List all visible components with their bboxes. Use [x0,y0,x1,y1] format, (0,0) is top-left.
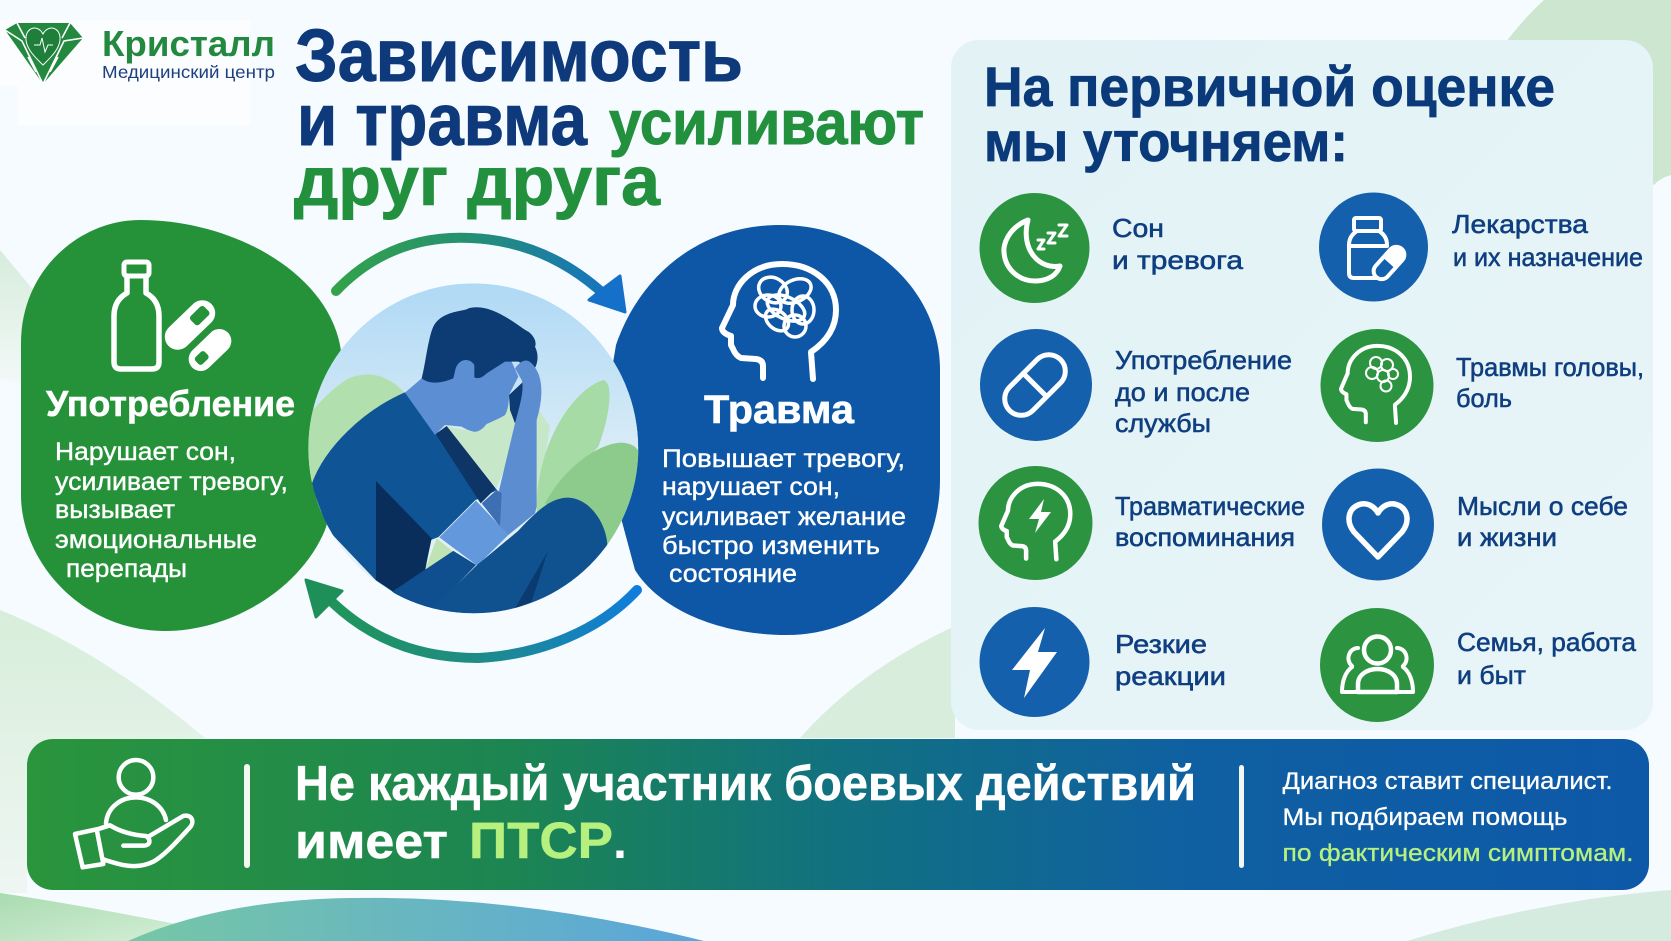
title: и травма [297,80,588,161]
banner [27,739,1649,890]
icon: moon [1004,220,1067,281]
text: Резкие [1115,629,1207,659]
panel: substance use [21,220,345,631]
side note: по фактическим симптомам. [1282,840,1634,867]
title: друг друга [294,142,661,220]
text [1457,627,1637,690]
text: use effects: Нарушает сон, [55,438,236,466]
panel heading: мы уточняем: [984,110,1348,173]
text: Сон [1112,213,1164,243]
item: family, work and daily life [1320,608,1637,722]
text: Употребление [1115,345,1292,375]
icon: lightning [1012,628,1057,698]
heading: Травма: Травма [704,388,855,432]
icon: heart [1349,504,1407,557]
text: Лекарства [1452,209,1589,239]
text: use effects: перепады [66,555,187,583]
icon: head with tangled brain [722,264,836,379]
icon: people [1342,636,1413,692]
text: реакции [1115,661,1226,691]
main statement: Не каждый участник боевых действий [295,757,1196,811]
text: use effects: усиливает тревогу, [55,468,288,496]
heading: Употребление: Употребление [46,383,295,424]
title [294,14,924,220]
text: trauma effects [662,445,906,588]
panel: trauma [600,225,940,635]
icon: head with lightning [1001,484,1070,559]
item: thoughts about self and life [1322,468,1628,580]
text [1452,209,1643,272]
text: Семья, работа [1457,627,1637,657]
logo subtitle: Медицинский центр [102,62,275,82]
item: traumatic memories [978,466,1305,580]
text: Травматические [1115,491,1305,521]
main statement: ПТСР [469,812,613,869]
text: trauma effects: быстро изменить [662,532,880,560]
title: Зависимость [295,14,743,97]
icon: bottle [114,262,159,369]
text: службы [1115,408,1211,438]
text [1115,345,1292,438]
text: и их назначение [1453,242,1643,272]
icon: head with brain [1341,346,1410,423]
text: и быт [1457,660,1526,690]
item: medication [1319,192,1643,302]
text: до и после [1115,377,1250,407]
icon: hand holding person [75,760,192,867]
text: воспоминания [1115,522,1295,552]
logo name: Кристалл [102,23,275,64]
side note: Мы подбираем помощь [1282,804,1568,831]
text: use effects: вызывает [55,496,176,524]
icon: pills [159,295,236,376]
illustration: person holding head [305,283,642,613]
panel heading: На первичной оценке [984,55,1555,118]
logo [0,20,275,125]
panel: primary assessment [951,40,1653,730]
item: sleep and anxiety [980,193,1244,303]
divider [244,764,250,868]
text: Мысли о себе [1457,491,1628,521]
text [1115,491,1305,552]
main statement: имеет [295,815,448,869]
text: trauma effects: состояние [669,560,797,588]
divider [1239,765,1244,868]
text [1457,491,1628,552]
text [1456,352,1644,413]
text: и тревога [1112,245,1244,275]
item: head injuries and pain [1320,329,1644,442]
text: use effects: эмоциональные [55,526,257,554]
icon: capsule [998,348,1072,422]
text [1115,629,1226,691]
icon: crystal heart [5,23,83,84]
side note: Диагноз ставит специалист. [1282,768,1612,795]
main statement [295,757,1196,869]
title: усиливают [609,89,924,158]
panel heading [984,55,1555,173]
icon: medicine bottle and pill [1349,218,1408,282]
main statement: . [613,813,627,869]
text: trauma effects: Повышает тревогу, [662,445,905,473]
arrow: trauma to use [306,580,637,658]
text [1112,213,1244,275]
text: Травмы головы, [1456,352,1644,382]
text: и жизни [1457,522,1557,552]
text: use effects [55,438,288,583]
text: боль [1456,383,1512,413]
arrow: use to trauma [336,238,625,312]
item: use before and after service [980,329,1292,441]
item: sharp reactions [980,607,1226,717]
text: trauma effects: нарушает сон, [662,473,840,501]
side note [1282,768,1634,867]
text: trauma effects: усиливает желание [662,503,906,531]
